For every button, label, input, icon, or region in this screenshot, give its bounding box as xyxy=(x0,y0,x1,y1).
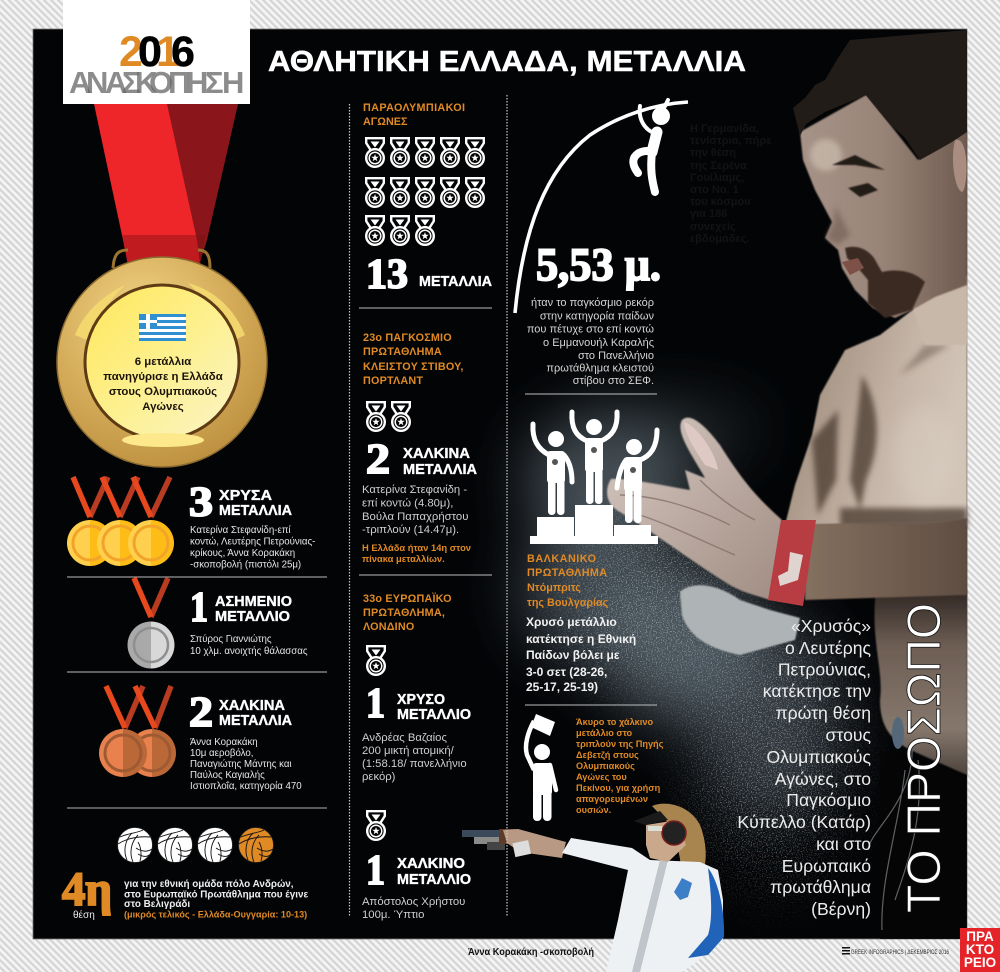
record text: στο Πανελλήνιο xyxy=(578,350,654,362)
jacket xyxy=(562,838,723,972)
strap logo xyxy=(778,552,803,586)
year 2016: 0 xyxy=(138,28,162,76)
year 2016: 1 xyxy=(156,28,180,76)
doping block xyxy=(526,714,664,821)
abdomen xyxy=(874,590,967,775)
bronze medals xyxy=(99,686,176,777)
heading: ΑΘΛΗΤΙΚΗ ΕΛΛΑΔΑ, ΜΕΤΑΛΛΙΑ xyxy=(268,46,746,78)
heading: 33ο ΕΥΡΩΠΑΪΚΟ xyxy=(363,592,452,605)
review word: Κ xyxy=(135,65,158,100)
heading: ΠΟΡΤΛΑΝΤ xyxy=(363,375,423,387)
hidden dark text: Γουίλιαμς, xyxy=(690,172,744,184)
heading: ΠΡΩΤΑΘΛΗΜΑ xyxy=(363,346,442,358)
label: ΜΕΤΑΛΛΙΑ xyxy=(403,462,478,478)
number: 1 xyxy=(366,848,385,894)
record text: ο Εμμανουήλ Καραλής xyxy=(543,337,654,349)
doping text: Πεκίνου, για χρήση xyxy=(576,783,661,793)
doping text: απαγορευμένων xyxy=(576,794,648,804)
bronze text: 10μ αεροβόλο, xyxy=(190,748,253,759)
text: 100μ. Ύπτιο xyxy=(362,909,424,921)
hidden dark text: εβδομάδες. xyxy=(690,233,750,245)
profile text: ο Λευτέρης xyxy=(785,638,871,658)
vertical label: ΤΟ ΠΡΟΣΩΠΟ xyxy=(897,603,950,913)
caption: shooter: Άννα Κορακάκη -σκοποβολή xyxy=(468,947,594,958)
label: ΜΕΤΑΛΛΙΟ xyxy=(397,707,471,723)
location: της Βουλγαρίας xyxy=(527,597,609,609)
ribbon xyxy=(167,104,238,262)
heading: 23ο ΠΑΓΚΟΣΜΙΟ xyxy=(363,332,452,344)
profile text: (Βέρνη) xyxy=(811,899,871,919)
pole xyxy=(515,102,688,313)
gold section xyxy=(67,477,315,570)
bronze text: Ιστιοπλοΐα, κατηγορία 470 xyxy=(190,781,302,792)
flag bearer icon xyxy=(526,714,556,821)
text: -τριπλούν (14.47μ). xyxy=(362,524,459,536)
gold volleyball text: κατέκτησε η Εθνική xyxy=(526,632,636,646)
bronze text: Παύλος Καγιαλής xyxy=(190,770,265,781)
hidden dark text: την θέση xyxy=(690,147,736,159)
text: επί κοντώ (4.80μ), xyxy=(362,498,453,510)
profile text: πρωτάθλημα xyxy=(770,877,871,897)
medal icons xyxy=(366,138,484,245)
review word: Α xyxy=(105,65,127,100)
jacket shading and zip xyxy=(632,860,668,972)
pole vault block xyxy=(515,100,688,387)
profile text: Πετρούνιας, xyxy=(778,660,871,680)
nose shading xyxy=(826,205,850,245)
lower chalky hand xyxy=(680,585,800,655)
bronze heading: ΜΕΤΑΛΛΙΑ xyxy=(219,713,293,729)
doping text: Ολυμπιακούς xyxy=(576,761,635,771)
ear muffs xyxy=(662,821,686,845)
balls xyxy=(118,828,274,862)
visor xyxy=(634,811,668,825)
profile text: στους xyxy=(826,725,871,745)
review word: Σ xyxy=(205,65,224,100)
record text: που πέτυχε στο επί κοντώ xyxy=(527,324,654,336)
gold volleyball text: 3-0 σετ (28-26, xyxy=(526,665,607,679)
gold heading: ΧΡΥΣΑ xyxy=(219,488,273,504)
logo: ΡΕΙΟ xyxy=(964,955,996,970)
review word: Ν xyxy=(86,65,108,100)
ear with earring xyxy=(953,140,966,192)
location: Ντόμπριτς xyxy=(527,582,581,594)
profile text: και στο xyxy=(816,834,871,854)
gold text: κοντώ, Λευτέρης Πετρούνιας- xyxy=(190,536,315,548)
flag of Greece xyxy=(139,314,186,341)
number 1: 1 xyxy=(190,585,208,631)
text: Βούλα Παπαχρήστου xyxy=(362,511,468,523)
label: ΧΑΛΚΙΝΑ xyxy=(403,446,471,462)
polo text: για την εθνική ομάδα πόλο Ανδρών, xyxy=(124,879,294,890)
label: ΜΕΤΑΛΛΙΟ xyxy=(397,872,471,888)
label: ΜΕΤΑΛΛΙΑ xyxy=(419,274,493,290)
hidden dark text: Η Γερμανίδα, xyxy=(690,123,759,135)
number 3: 3 xyxy=(189,480,213,526)
polo score: (μικρός τελικός - Ελλάδα-Ουγγαρία: 10-13) xyxy=(124,910,307,920)
polo text: στο Βελιγράδι xyxy=(124,899,190,910)
record text: ήταν το παγκόσμιο ρεκόρ xyxy=(531,297,654,309)
gold text: Κατερίνα Στεφανίδη-επί xyxy=(190,525,291,536)
strap xyxy=(768,520,816,606)
note: πίνακα μεταλλίων. xyxy=(362,553,445,564)
silver text: 10 χλμ. ανοιχτής θάλασσας xyxy=(190,646,308,657)
gun-hand card xyxy=(512,840,531,857)
gold medals xyxy=(67,477,174,566)
photo: chalk cloud xyxy=(520,400,850,890)
silver text: Σπύρος Γιαννιώτης xyxy=(190,634,272,645)
chest and shoulder xyxy=(785,285,967,525)
review word: Η xyxy=(186,65,208,100)
silver heading: ΜΕΤΑΛΛΙΟ xyxy=(215,609,290,625)
medal text: 6 μετάλλια xyxy=(135,356,191,368)
gold text: κρίκους, Άννα Κορακάκη xyxy=(190,548,295,559)
logo xyxy=(960,928,1000,972)
record text: στην κατηγορία παίδων xyxy=(540,310,654,322)
heading: ΚΛΕΙΣΤΟΥ ΣΤΙΒΟΥ, xyxy=(363,361,464,373)
text: ρεκόρ) xyxy=(362,771,396,783)
face and neck xyxy=(646,820,686,862)
credit text: GREEK INFOGRAPHICS | ΔΕΚΕΜΒΡΙΟΣ 2016 xyxy=(851,949,949,956)
gold volleyball text: 25-17, 25-19) xyxy=(526,680,598,694)
review word: Α xyxy=(69,65,91,100)
silver section xyxy=(128,578,308,668)
glasses xyxy=(648,826,662,831)
hidden dark text: στο Νο. 1 xyxy=(690,184,739,196)
heading: ΛΟΝΔΙΝΟ xyxy=(363,621,414,633)
year 2016: 6 xyxy=(171,28,195,76)
text: (1:58.18/ πανελλήνιο xyxy=(362,758,467,770)
heading: ΠΡΩΤΑΘΛΗΜΑ, xyxy=(363,607,445,619)
photo: gymnast Petrounias xyxy=(607,30,967,939)
doping text: μετάλλιο στο xyxy=(576,728,633,738)
icons xyxy=(367,402,410,431)
note: Η Ελλάδα ήταν 14η στον xyxy=(362,542,471,553)
gold text: -σκοποβολή (πιστόλι 25μ) xyxy=(190,560,301,570)
profile text: Ολυμπιακούς xyxy=(766,747,871,767)
text: Κατερίνα Στεφανίδη - xyxy=(362,484,467,496)
bronze text: Άννα Κορακάκη xyxy=(190,737,258,748)
pole vaulter icon xyxy=(633,100,670,192)
brow and eye xyxy=(832,155,885,197)
profile text: κατέκτησε την xyxy=(763,681,871,701)
medal rim xyxy=(57,257,267,467)
doping text: ουσιών. xyxy=(576,805,611,815)
doping text: τριπλούν της Πηγής xyxy=(576,739,664,749)
label: ΧΑΛΚΙΝΟ xyxy=(397,856,465,872)
bronze heading: ΧΑΛΚΙΝΑ xyxy=(219,698,286,714)
heading: ΑΓΩΝΕΣ xyxy=(363,116,408,128)
hair xyxy=(793,30,967,160)
review word: Π xyxy=(168,65,190,100)
icon xyxy=(842,947,850,954)
record text: πρωτάθλημα κλειστού xyxy=(546,362,654,374)
tattoo xyxy=(892,717,904,749)
forehead highlight xyxy=(810,139,842,171)
count: 13 xyxy=(366,252,408,298)
text: Ανδρέας Βαζαίος xyxy=(362,732,447,744)
hidden dark text: τενίστρια, πήρε xyxy=(690,135,772,147)
water polo section xyxy=(62,828,308,921)
hand xyxy=(607,418,782,600)
chest shading xyxy=(812,345,967,528)
profile text: Ευρωπαικό xyxy=(782,856,871,876)
loop xyxy=(113,250,210,268)
gold volleyball text: Χρυσό μετάλλιο xyxy=(526,615,617,629)
logo: ΚΤΟ xyxy=(966,942,994,957)
gun hand and forearm xyxy=(503,829,566,858)
face xyxy=(800,95,967,318)
podium icon xyxy=(530,412,658,544)
review word: Ο xyxy=(149,65,173,100)
thumb highlight xyxy=(684,422,718,470)
doping text: Αγώνες του xyxy=(576,772,627,782)
text: 200 μικτή ατομική/ xyxy=(362,745,455,757)
logo: ΠΡΑ xyxy=(966,929,994,944)
label: ΧΡΥΣΟ xyxy=(397,692,445,708)
title box xyxy=(63,0,250,104)
profile text: Παγκόσμιο xyxy=(786,790,871,810)
flag badge xyxy=(674,878,692,900)
medal text: στους Ολυμπιακούς xyxy=(109,386,217,398)
silver heading: ΑΣΗΜΕΝΙΟ xyxy=(215,594,292,610)
profile text: πρώτη θέση xyxy=(775,703,871,723)
medal text: πανηγύρισε η Ελλάδα xyxy=(103,371,223,383)
silver medal xyxy=(128,578,174,668)
volleyball block xyxy=(526,412,658,694)
finger creases xyxy=(620,480,755,555)
gold heading: ΜΕΤΑΛΛΙΑ xyxy=(219,503,293,519)
paralympics block xyxy=(363,102,493,298)
pistol xyxy=(462,829,515,850)
forearm xyxy=(805,518,967,600)
rim shines xyxy=(75,283,245,342)
blue sleeve stripe xyxy=(688,868,724,958)
record text: στίβου στο ΣΕΦ. xyxy=(573,375,654,387)
neck xyxy=(912,275,967,345)
number: 1 xyxy=(366,681,385,727)
profile text: «Χρυσός» xyxy=(791,616,871,636)
hidden dark text: για 186 xyxy=(690,208,727,220)
review word: Σ xyxy=(122,65,141,100)
bronze text: Παναγιώτης Μάντης και xyxy=(190,759,292,770)
location: ΠΡΩΤΑΘΛΗΜΑ xyxy=(527,567,607,579)
place label: θέση xyxy=(73,909,95,921)
hair xyxy=(652,804,706,880)
medal text: Αγώνες xyxy=(142,401,184,413)
gold volleyball text: Παίδων βόλει με xyxy=(526,648,620,662)
doping text: Δεβετζή στους xyxy=(576,750,639,760)
review word: Η xyxy=(222,65,244,100)
big medal xyxy=(57,104,267,467)
number: 2 xyxy=(366,437,390,483)
ribbon shade xyxy=(122,235,205,268)
profile text: Αγώνες, στο xyxy=(775,769,871,789)
medal face xyxy=(85,285,239,439)
4th place: 4η xyxy=(62,863,112,916)
year 2016: 2 xyxy=(119,28,143,76)
heading: ΠΑΡΑΟΛΥΜΠΙΑΚΟΙ xyxy=(363,102,465,114)
footer credit xyxy=(842,947,949,956)
photo: shooter Korakaki xyxy=(462,804,724,972)
hidden dark text: συνεχείς xyxy=(690,221,736,233)
number 2: 2 xyxy=(189,690,213,736)
icon xyxy=(367,811,385,840)
hidden dark text: του κόσμου xyxy=(690,196,751,208)
record: 5,53 μ. xyxy=(536,239,661,291)
doping text: Άκυρο το χάλκινο xyxy=(576,717,653,727)
polo text: στο Ευρωπαϊκό Πρωτάθλημα που έγινε xyxy=(124,890,308,900)
world indoor block xyxy=(362,332,478,564)
bottom shine xyxy=(122,433,204,447)
pec highlight xyxy=(895,407,955,503)
hidden dark text: της Σερένα xyxy=(690,160,747,172)
bronze section xyxy=(99,686,302,792)
dotted column rules xyxy=(350,95,507,917)
text: Απόστολος Χρήστου xyxy=(362,896,465,908)
icon xyxy=(367,646,385,675)
waistband and cords xyxy=(880,750,967,939)
location: ΒΑΛΚΑΝΙΚΟ xyxy=(527,553,596,565)
beard xyxy=(845,247,925,318)
profile text: Κύπελλο (Κατάρ) xyxy=(737,812,871,832)
lips xyxy=(842,258,864,275)
european swimming block xyxy=(362,592,471,921)
